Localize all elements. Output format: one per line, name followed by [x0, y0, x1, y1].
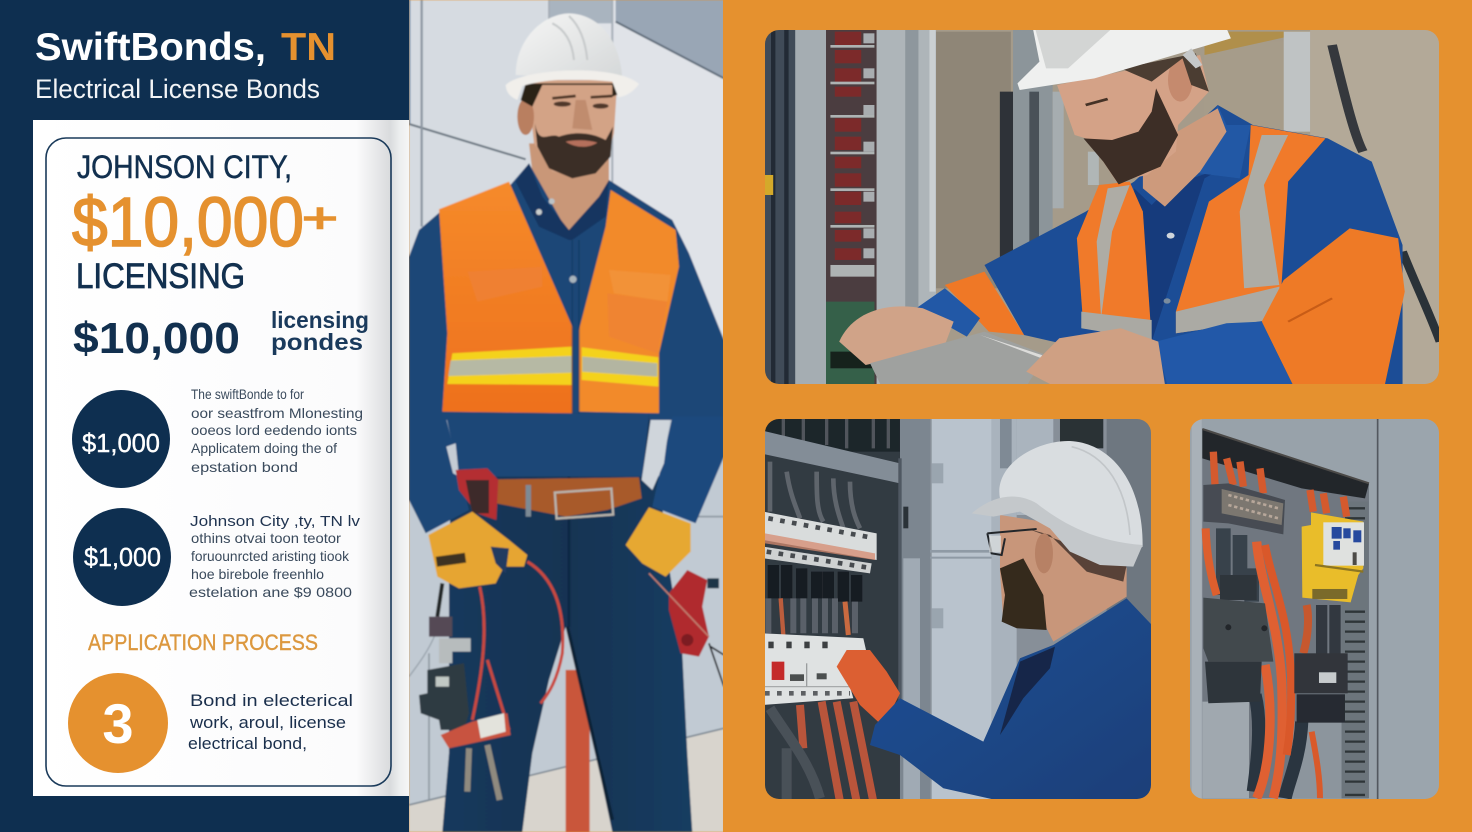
text block: second description	[189, 513, 361, 600]
cables	[773, 565, 857, 602]
face and head	[1057, 55, 1209, 182]
holster	[456, 468, 498, 520]
photo: electrician standing with hard hat and vest	[409, 0, 724, 832]
orange background	[723, 0, 1472, 832]
lower cables	[800, 702, 873, 802]
glasses	[987, 529, 1037, 555]
neck and head	[1000, 515, 1127, 642]
text block: step description: electrical bond,	[188, 734, 307, 753]
big figure: +	[302, 194, 338, 241]
big figure: $10,000	[72, 183, 304, 261]
circle badge: $1,000 first	[72, 390, 170, 488]
step badge: 3	[68, 673, 168, 773]
red cables	[527, 562, 563, 703]
panel: navy sidebar	[0, 0, 409, 832]
label: licensing bonds: licensing	[271, 307, 369, 333]
text block: first description: ooeos lord eedendo ionts	[191, 422, 357, 438]
top terminal block	[1203, 483, 1285, 534]
orange cables top	[1213, 452, 1347, 517]
photo: electrician inspecting panel with tablet	[760, 25, 1450, 390]
heading: application process: APPLICATION PROCESS	[88, 630, 318, 655]
right glove	[626, 507, 691, 577]
vest straps	[1077, 182, 1152, 340]
face	[527, 80, 617, 177]
text block: second description: estelation ane $9 0800	[189, 584, 352, 600]
hard hat	[516, 13, 622, 80]
vest	[439, 182, 679, 413]
title: SwiftBonds,	[35, 26, 266, 69]
louvre	[1342, 502, 1368, 798]
right grey doors	[932, 418, 992, 805]
text block: second description: Johnson City ,ty, TN lv	[190, 513, 361, 530]
circle badge: $1,000 first: $1,000	[82, 428, 160, 458]
glove	[837, 650, 900, 727]
text block: second description: othins otvai toon teotor	[191, 530, 341, 546]
jacket	[870, 598, 1155, 805]
text block: first description: The swiftBonde to for	[191, 386, 304, 402]
red pouch	[669, 570, 709, 657]
belt	[496, 477, 642, 517]
lower housing	[1203, 598, 1273, 662]
subtitle: Electrical License Bonds	[35, 74, 320, 104]
orange sleeve	[1262, 228, 1405, 384]
text block: step description	[188, 691, 353, 753]
card outline	[46, 138, 391, 786]
breaker rows	[835, 32, 861, 260]
photo: electrician working on breakers	[760, 415, 1155, 805]
text block: step description: Bond in electerical	[190, 691, 353, 710]
open cabinet interior	[760, 452, 900, 805]
jeans	[442, 390, 692, 832]
photo: electrical cabinet with orange cables	[1185, 415, 1445, 805]
torso	[984, 105, 1403, 390]
lower breaker	[763, 633, 866, 705]
hard hat	[999, 441, 1143, 555]
yellow device	[1302, 512, 1363, 602]
meter tool	[429, 617, 452, 637]
neck	[529, 143, 609, 240]
label: licensing bonds: pondes	[271, 329, 363, 355]
circle badge: $1,000 second: $1,000	[84, 542, 161, 572]
title: TN	[281, 26, 336, 69]
step badge: 3: 3	[102, 692, 134, 755]
dark cables	[1223, 528, 1252, 602]
text block: step description: work, aroul, license	[189, 713, 346, 732]
text block: second description: hoe birebole freenhlo	[191, 566, 324, 582]
shirt torso and arms	[409, 163, 724, 420]
text block: first description: Applicatem doing the of	[191, 440, 337, 456]
left wiring	[765, 30, 796, 384]
bond amount: $10,000	[73, 314, 240, 363]
panel: white content card	[33, 120, 409, 796]
left glove	[428, 512, 527, 588]
pole	[566, 670, 590, 832]
second housing	[1294, 653, 1348, 693]
text block: second description: foruounrcted aristing tiook	[191, 548, 350, 564]
upper breaker row	[763, 512, 877, 560]
circle badge: $1,000 second	[73, 508, 171, 606]
hands and tablet	[839, 306, 954, 365]
connectors	[1220, 575, 1257, 600]
heading: city: JOHNSON CITY,	[77, 149, 292, 185]
rear cabinet rail	[1000, 92, 1013, 258]
neck	[1143, 108, 1227, 207]
orange cables	[1206, 528, 1217, 595]
hard hat	[1017, 28, 1231, 90]
text block: first description	[191, 386, 363, 475]
heading: licensing: LICENSING	[76, 257, 245, 296]
label: licensing bonds	[271, 307, 369, 355]
left arm cuff	[945, 272, 1024, 335]
text block: first description: epstation bond	[191, 459, 298, 475]
text block: first description: oor seastfrom Mlonesting	[191, 405, 363, 421]
conduit and cable	[1284, 32, 1310, 132]
